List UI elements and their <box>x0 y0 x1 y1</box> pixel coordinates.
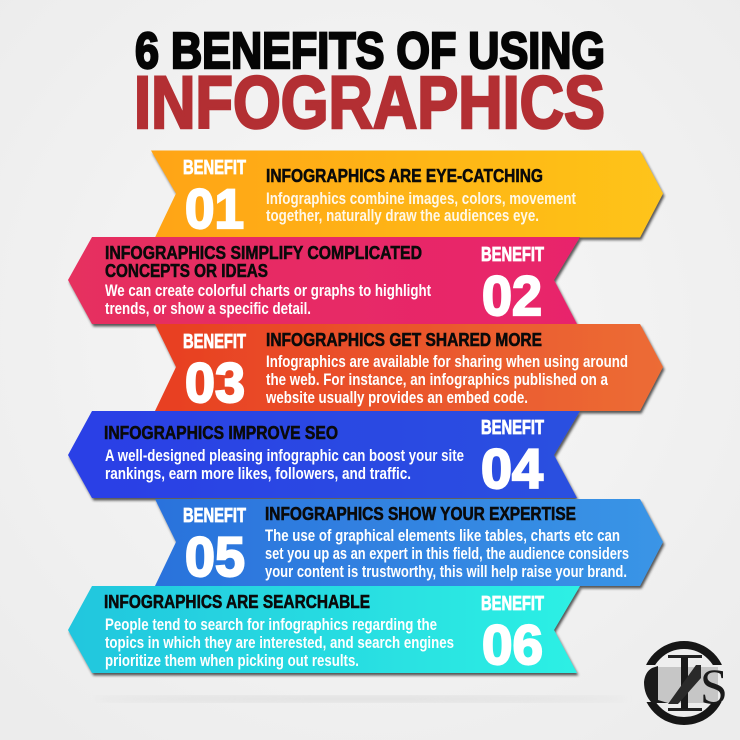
number 2: 02 <box>482 264 542 327</box>
body 6 <box>105 616 454 670</box>
heading 1: INFOGRAPHICS ARE EYE-CATCHING <box>266 165 543 186</box>
ribbon 6 <box>68 586 580 673</box>
body 1: together, naturally draw the audiences eye. <box>266 207 539 225</box>
panel: benefit 5 <box>155 499 663 588</box>
title <box>134 22 605 144</box>
body 5: The use of graphical elements like tables, charts etc can <box>265 527 620 545</box>
label 2: BENEFIT <box>481 244 544 266</box>
body 2: trends, or show a specific detail. <box>105 300 311 318</box>
body 3: website usually provides an embed code. <box>265 389 528 407</box>
ribbon 3 <box>155 324 663 411</box>
icon: logo: S <box>700 658 728 714</box>
number 4: 04 <box>481 437 543 500</box>
heading 2: INFOGRAPHICS SIMPLIFY COMPLICATED <box>105 242 422 263</box>
body 6: People tend to search for infographics regarding the <box>105 616 437 634</box>
icon: logo <box>644 645 728 721</box>
body 4 <box>105 447 464 483</box>
body 5 <box>265 527 629 581</box>
heading 2: CONCEPTS OR IDEAS <box>105 260 268 281</box>
body 4: A well-designed pleasing infographic can boost your site <box>105 447 464 465</box>
body 3: Infographics are available for sharing when using around <box>266 353 628 371</box>
ribbon 1 <box>151 150 663 238</box>
heading 4: INFOGRAPHICS IMPROVE SEO <box>104 422 338 443</box>
label 5: BENEFIT <box>183 505 246 527</box>
ribbon 4 <box>68 411 580 498</box>
body 5: your content is trustworthy, this will help raise your brand. <box>265 563 627 581</box>
panel: benefit 3 <box>155 324 663 414</box>
label 4: BENEFIT <box>481 417 544 439</box>
panel: benefit 1 <box>151 150 663 240</box>
body 6: prioritize them when picking out results. <box>105 652 359 670</box>
body 1 <box>266 190 576 225</box>
body 2 <box>105 282 431 318</box>
body 4: rankings, earn more likes, followers, and traffic. <box>105 465 411 483</box>
number 6: 06 <box>482 613 543 676</box>
label 3: BENEFIT <box>183 331 246 353</box>
heading 6: INFOGRAPHICS ARE SEARCHABLE <box>104 591 370 612</box>
number 3: 03 <box>185 351 245 414</box>
body 3 <box>265 353 628 407</box>
body 5: set you up as an expert in this field, the audience considers <box>265 545 629 563</box>
heading 2 <box>105 242 422 281</box>
title line: infographics: INFOGRAPHICS <box>134 61 605 144</box>
label 1: BENEFIT <box>183 157 246 179</box>
title line: 6 benefits of using: 6 BENEFITS OF USING <box>135 22 605 79</box>
ribbon 5 <box>155 499 663 586</box>
ribbon 2 <box>68 237 580 324</box>
panel: benefit 6 <box>68 586 580 676</box>
body 6: topics in which they are interested, and search engines <box>105 634 454 652</box>
heading 5: INFOGRAPHICS SHOW YOUR EXPERTISE <box>265 503 576 524</box>
body 3: the web. For instance, an infographics published on a <box>266 371 609 389</box>
heading 3: INFOGRAPHICS GET SHARED MORE <box>266 329 542 350</box>
panel: benefit 2 <box>68 237 580 327</box>
number 1: 01 <box>185 177 244 240</box>
number 5: 05 <box>185 525 245 588</box>
panel: benefit 4 <box>68 411 580 500</box>
body 1: Infographics combine images, colors, movement <box>266 190 576 208</box>
label 6: BENEFIT <box>481 593 544 615</box>
body 2: We can create colorful charts or graphs to highlight <box>105 282 431 300</box>
